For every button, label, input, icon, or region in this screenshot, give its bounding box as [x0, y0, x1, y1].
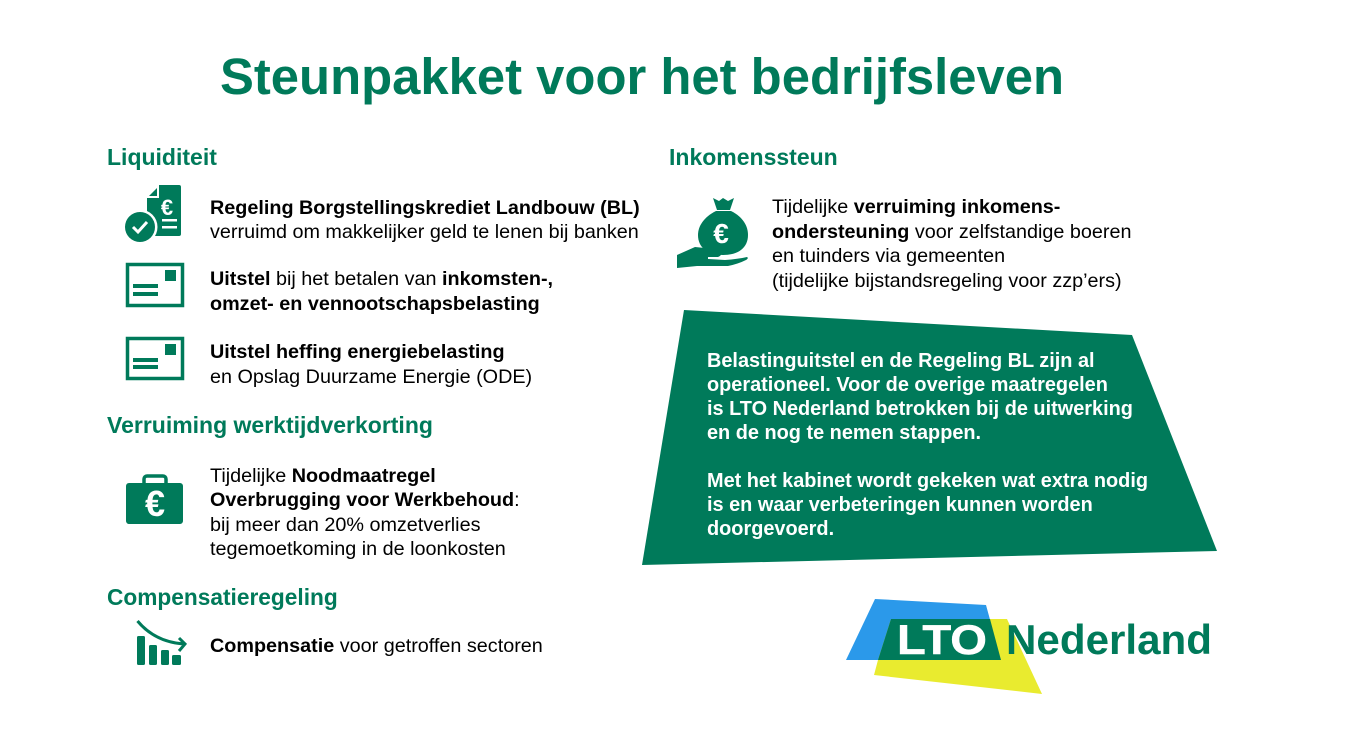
callout text 2: Met het kabinet wordt gekeken wat extra nodig	[707, 470, 1148, 492]
text: inkomensondersteuning: en tuinders via gemeenten	[772, 245, 1005, 267]
text: Noodmaatregel: Overbrugging voor Werkbehoud:	[210, 489, 520, 511]
callout text 1: Belastinguitstel en de Regeling BL zijn al	[707, 350, 1095, 372]
callout text 2	[707, 470, 1148, 540]
callout text 1	[707, 350, 1133, 444]
text: inkomensondersteuning	[772, 196, 1132, 292]
title: Steunpakket voor het bedrijfsleven	[220, 48, 1064, 105]
callout text 2: doorgevoerd.	[707, 518, 834, 540]
text: Uitstel energiebelasting	[210, 341, 532, 388]
logo: LTO Nederland: Nederland	[1006, 616, 1212, 663]
text: Noodmaatregel	[210, 465, 520, 560]
heading: Inkomenssteun: Inkomenssteun	[669, 144, 838, 170]
text: inkomensondersteuning: (tijdelijke bijstandsregeling voor zzp’ers)	[772, 270, 1122, 292]
callout text 1: is LTO Nederland betrokken bij de uitwerking	[707, 398, 1133, 420]
text: inkomensondersteuning: ondersteuning voor zelfstandige boeren	[772, 221, 1132, 243]
text: Noodmaatregel: tegemoetkoming in de loonkosten	[210, 538, 506, 560]
text: Uitstel energiebelasting: Uitstel heffing energiebelasting	[210, 341, 505, 363]
text: Noodmaatregel: bij meer dan 20% omzetverlies	[210, 514, 480, 536]
text: Uitstel belasting: Uitstel bij het betalen van inkomsten-,	[210, 268, 553, 290]
icon: hand with money bag: €	[713, 218, 729, 249]
callout text 1: en de nog te nemen stappen.	[707, 422, 981, 444]
text: Regeling BL: Regeling Borgstellingskrediet Landbouw (BL)	[210, 196, 640, 218]
text: Regeling BL	[210, 196, 640, 243]
text: Uitstel belasting: omzet- en vennootschapsbelasting	[210, 292, 540, 314]
icon: document with euro and check: €	[161, 195, 173, 220]
heading: Compensatieregeling: Compensatieregeling	[107, 584, 338, 610]
heading: Verruiming werktijdverkorting: Verruiming werktijdverkorting	[107, 412, 433, 438]
icon: briefcase with euro: €	[145, 483, 165, 524]
text: Uitstel belasting	[210, 268, 553, 314]
callout text 1: operationeel. Voor de overige maatregelen	[707, 374, 1108, 396]
text: Compensatie: Compensatie voor getroffen sectoren	[210, 635, 543, 657]
text: Regeling BL: verruimd om makkelijker geld te lenen bij banken	[210, 221, 639, 243]
text: inkomensondersteuning: Tijdelijke verruiming inkomens-	[772, 196, 1060, 218]
callout text 2: is en waar verbeteringen kunnen worden	[707, 494, 1093, 516]
logo: LTO Nederland: LTO	[897, 616, 987, 663]
text: Uitstel energiebelasting: en Opslag Duurzame Energie (ODE)	[210, 366, 532, 388]
text: Noodmaatregel: Tijdelijke Noodmaatregel	[210, 465, 436, 487]
heading: Liquiditeit: Liquiditeit	[107, 144, 217, 170]
